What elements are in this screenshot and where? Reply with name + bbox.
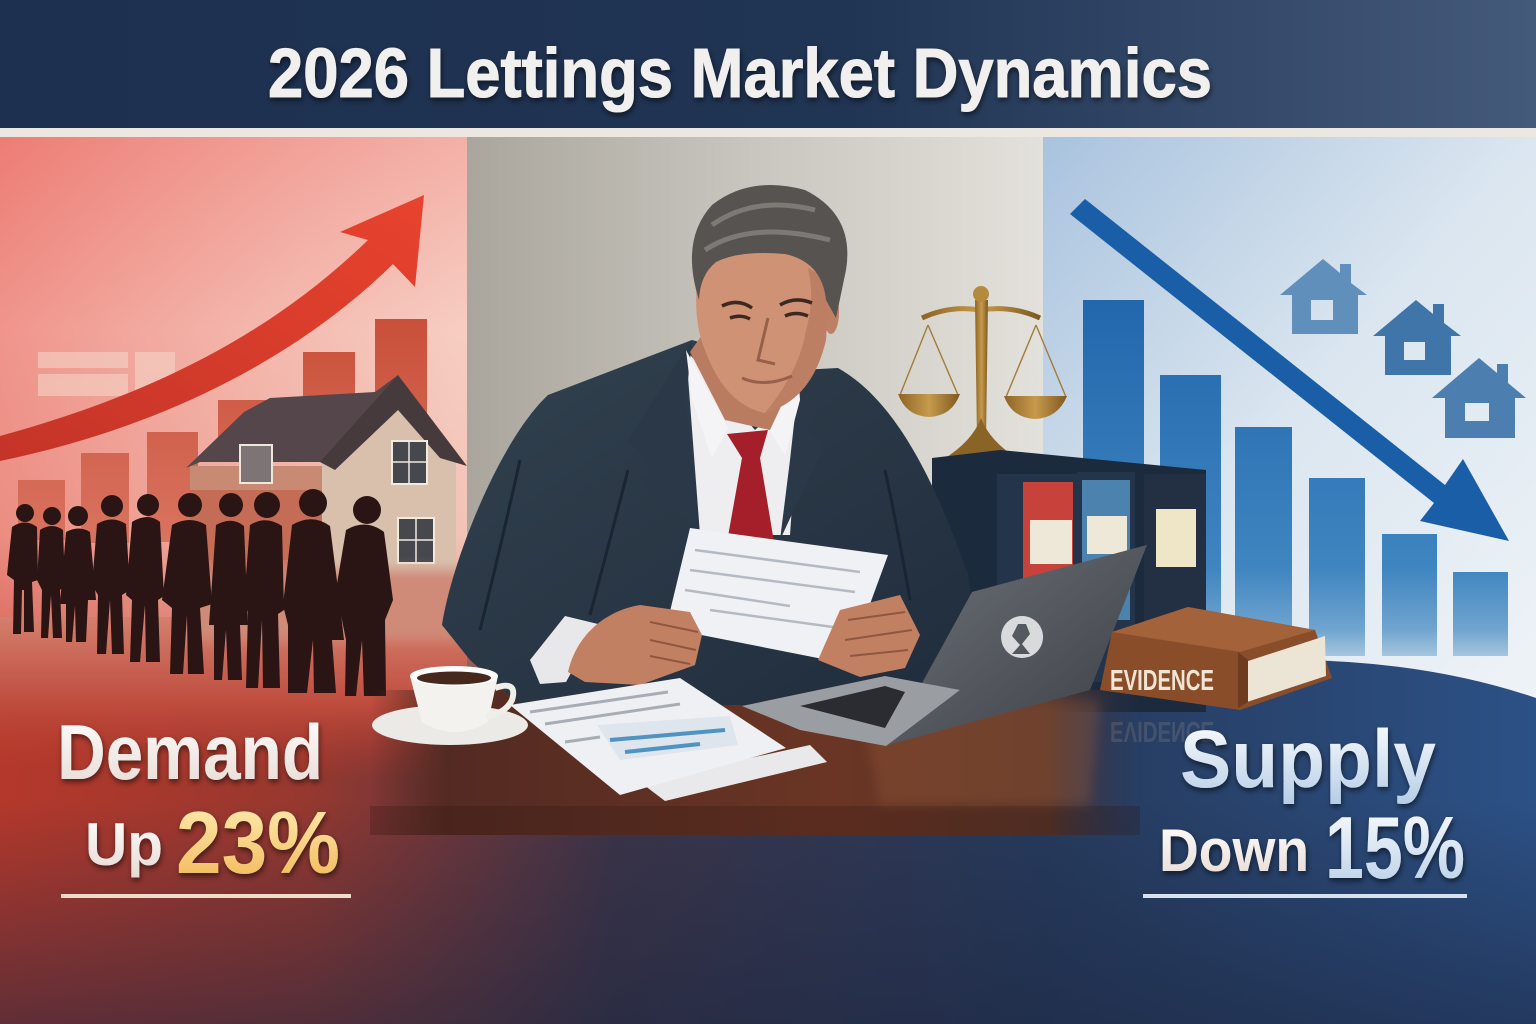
callout: supply down 15% [1159,714,1465,897]
arrow: demand up [0,195,424,461]
lapels [628,340,824,540]
papers on desk [510,678,827,801]
jacket creases [480,460,910,630]
icons: houses [1280,259,1526,438]
head [696,212,829,413]
hair [692,185,847,318]
tie [727,430,774,542]
panel: demand backdrop [0,137,467,780]
ear [823,290,839,334]
shirt [686,350,800,535]
callout: demand up 23%: 23% [176,793,340,892]
scales of justice [898,286,1067,460]
laptop [742,545,1147,746]
suit jacket [442,340,985,705]
collar [686,350,800,458]
document lines [685,550,860,628]
icon: house [180,375,467,640]
neck [690,335,798,430]
face shadow [765,268,829,413]
book labelled evidence [1100,607,1332,710]
nose and mouth [742,318,792,383]
callout: demand up 23%: Up [85,811,163,878]
callout: supply down 15%: Down [1159,817,1309,884]
coffee cup [372,666,528,745]
floor: supply side dark blue [1100,660,1536,770]
cuff [530,616,598,684]
binders [932,450,1206,712]
fingers [650,612,912,664]
callout: supply down 15%: Supply [1180,714,1436,805]
left hand [568,605,702,685]
arrow: supply down [1070,199,1509,541]
hair highlights [705,205,830,250]
callout: supply down 15%: 15% [1325,798,1465,897]
icon: laptop logo [1001,616,1043,658]
brows and eyes [722,300,812,319]
man reading a document [442,185,985,705]
background: lower gradient band [0,640,1536,1024]
callout: demand up 23%: Demand [57,708,323,796]
callout: demand up 23% [57,708,340,892]
header banner [0,0,1536,137]
desk [370,690,1140,835]
panel: supply backdrop [1043,137,1536,700]
silhouettes: queue of people [7,489,393,696]
title: 2026 Lettings Market Dynamics [268,34,1212,112]
underline: demand [61,894,351,898]
book labelled evidence: EVIDENCE [1110,665,1214,697]
panel: central backdrop [467,137,1043,700]
right hand [818,595,920,677]
bar chart: demand rising [18,319,427,543]
bar chart: supply falling [1083,300,1508,656]
reflection of evidence label: EVIDENCE [1110,715,1214,747]
underline: supply [1143,894,1467,898]
document held [666,528,888,664]
